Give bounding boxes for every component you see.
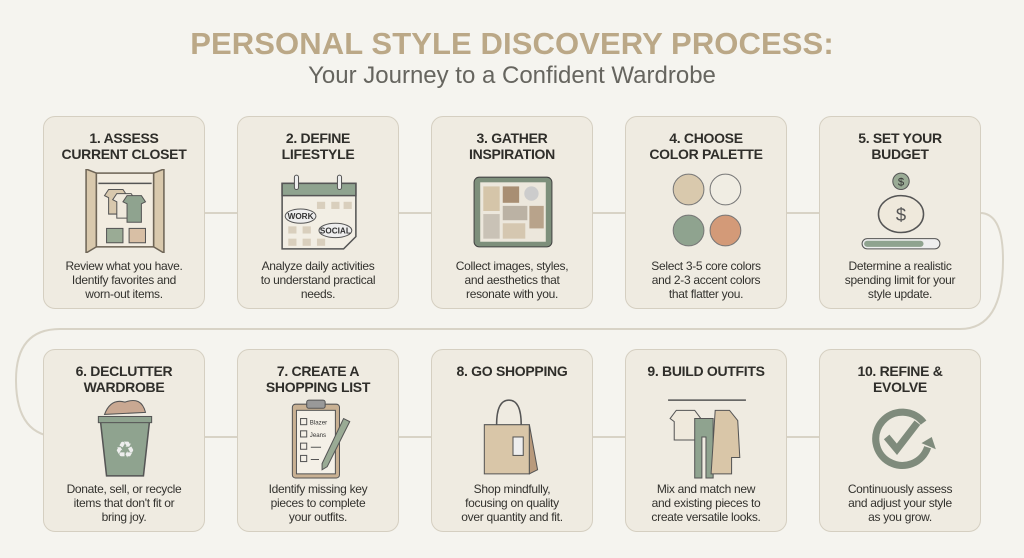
icon: refresh check: [872, 408, 936, 469]
heading 2: LIFESTYLE: [282, 146, 354, 162]
card 3: [431, 116, 593, 309]
desc 6: Donate, sell, or recycle: [67, 482, 181, 496]
card 6: [43, 349, 205, 532]
desc 10: and adjust your style: [848, 496, 952, 510]
desc 7: pieces to complete: [271, 496, 365, 510]
desc 6: bring joy.: [102, 510, 146, 524]
heading 7: SHOPPING LIST: [266, 379, 370, 395]
desc 2: [260, 259, 375, 301]
card 1: [43, 116, 205, 309]
desc 6: [67, 482, 182, 524]
card 10: [819, 349, 981, 532]
desc 9: create versatile looks.: [651, 510, 761, 524]
desc 2: needs.: [301, 287, 335, 301]
heading 10: EVOLVE: [873, 379, 927, 395]
desc 3: Collect images, styles,: [456, 259, 568, 273]
desc 4: and 2-3 accent colors: [652, 273, 760, 287]
desc 5: Determine a realistic: [848, 259, 952, 273]
heading 7: 7. CREATE A: [277, 363, 359, 379]
icon: calendar: WORK: [288, 212, 314, 221]
heading 8: 8. GO SHOPPING: [457, 363, 567, 379]
subtitle: Your Journey to a Confident Wardrobe: [308, 62, 716, 89]
heading 1: 1. ASSESS: [89, 130, 159, 146]
icon: calendar: SOCIAL: [320, 227, 351, 236]
desc 3: and aesthetics that: [464, 273, 560, 287]
card 5: [819, 116, 981, 309]
card 8: [431, 349, 593, 532]
heading 4: COLOR PALETTE: [649, 146, 763, 162]
icon: calendar: [281, 174, 357, 250]
desc 1: Review what you have.: [65, 259, 183, 273]
card 7: [237, 349, 399, 532]
icon: outfit on rack: [668, 399, 746, 478]
heading 3: 3. GATHER: [477, 130, 547, 146]
icon: piggy bank: $: [898, 176, 905, 188]
desc 2: to understand practical: [261, 273, 375, 287]
icon: clipboard: [292, 400, 350, 478]
icon: piggy bank: $: [896, 204, 906, 225]
card 2: [237, 116, 399, 309]
heading 7: [266, 363, 370, 395]
icon: palette swatches: [672, 174, 742, 246]
desc 4: Select 3-5 core colors: [651, 259, 761, 273]
desc 3: resonate with you.: [466, 287, 558, 301]
desc 1: worn-out items.: [85, 287, 163, 301]
desc 5: spending limit for your: [845, 273, 955, 287]
desc 1: [65, 259, 183, 301]
heading 6: 6. DECLUTTER: [76, 363, 172, 379]
icon: shopping bag: [484, 399, 538, 475]
desc 2: Analyze daily activities: [262, 259, 374, 273]
heading 1: [62, 130, 187, 162]
desc 9: Mix and match new: [657, 482, 755, 496]
heading 3: [469, 130, 555, 162]
desc 6: items that don't fit or: [74, 496, 174, 510]
desc 3: [456, 259, 568, 301]
icon: closet: [85, 169, 165, 253]
title: PERSONAL STYLE DISCOVERY PROCESS:: [190, 26, 834, 61]
heading 6: WARDROBE: [84, 379, 164, 395]
icon: clipboard: Blazer: [310, 420, 327, 427]
heading 5: BUDGET: [871, 146, 929, 162]
desc 7: [269, 482, 368, 524]
heading 1: CURRENT CLOSET: [62, 146, 186, 162]
heading 2: 2. DEFINE: [286, 130, 350, 146]
desc 10: [848, 482, 952, 524]
desc 8: [461, 482, 563, 524]
card 4: [625, 116, 787, 309]
heading 4: 4. CHOOSE: [669, 130, 743, 146]
desc 7: Identify missing key: [269, 482, 367, 496]
desc 8: over quantity and fit.: [461, 510, 563, 524]
card 9: [625, 349, 787, 532]
desc 1: Identify favorites and: [72, 273, 176, 287]
desc 4: [651, 259, 761, 301]
heading 6: [76, 363, 172, 395]
heading 5: [858, 130, 942, 162]
desc 5: [845, 259, 956, 301]
desc 7: your outfits.: [289, 510, 347, 524]
heading 3: INSPIRATION: [469, 146, 555, 162]
heading 10: [857, 363, 943, 395]
heading 9: 9. BUILD OUTFITS: [647, 363, 765, 379]
desc 8: focusing on quality: [465, 496, 559, 510]
icon: clipboard: Jeans: [310, 432, 326, 439]
desc 5: style update.: [868, 287, 932, 301]
desc 9: [651, 482, 761, 524]
icon: tablet moodboard: [474, 176, 552, 248]
desc 10: as you grow.: [868, 510, 932, 524]
icon: piggy bank: [862, 172, 940, 250]
icon: recycle bin: ♻: [115, 437, 135, 462]
heading 2: [282, 130, 354, 162]
desc 10: Continuously assess: [848, 482, 952, 496]
heading 5: 5. SET YOUR: [858, 130, 942, 146]
desc 9: and existing pieces to: [652, 496, 760, 510]
heading 10: 10. REFINE &: [857, 363, 943, 379]
desc 4: that flatter you.: [669, 287, 743, 301]
icon: recycle bin: [98, 400, 152, 477]
desc 8: Shop mindfully,: [474, 482, 550, 496]
heading 4: [649, 130, 763, 162]
